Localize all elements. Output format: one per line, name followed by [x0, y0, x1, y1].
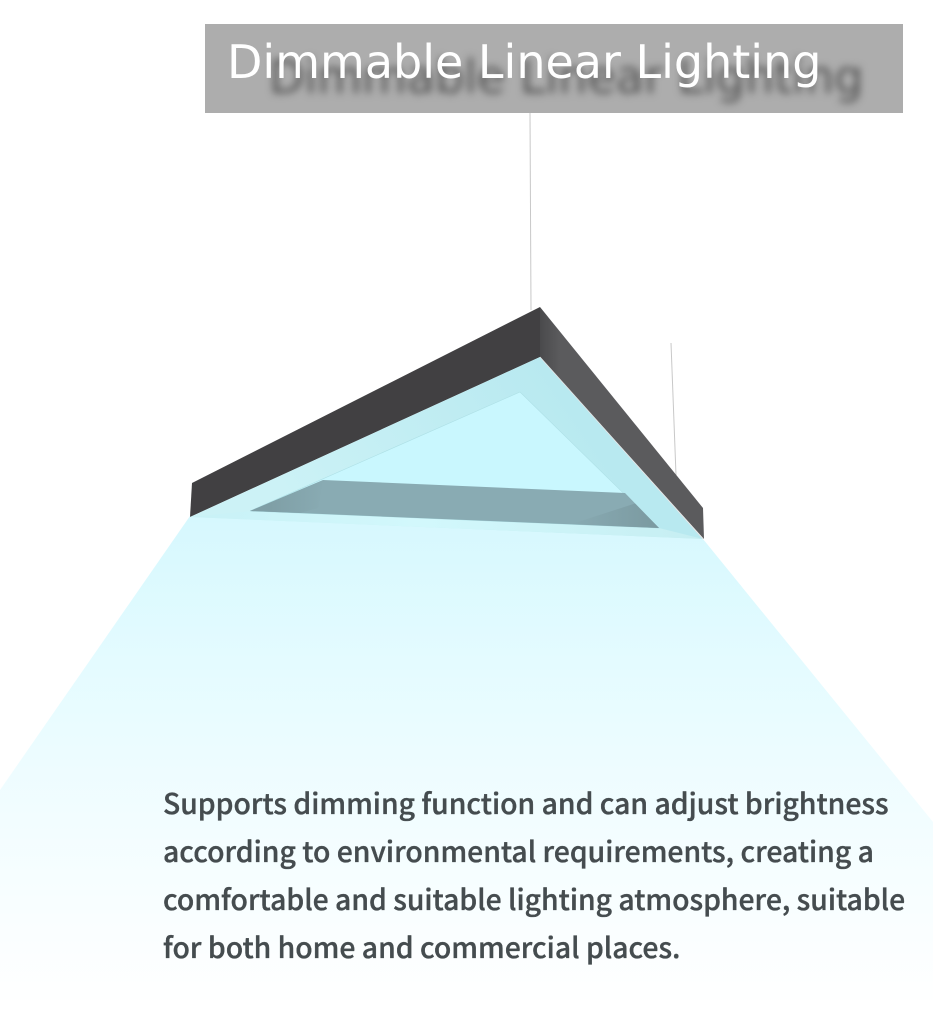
description text: [163, 782, 905, 967]
light beam: [0, 516, 933, 1011]
suspension wires: [530, 112, 676, 475]
inner opening: [250, 392, 659, 528]
frame bottom strip: [190, 511, 703, 539]
diffuser frame: [190, 357, 703, 539]
frame edge highlight: [540, 357, 703, 539]
description text: according to environmental requirements, creating a: [163, 830, 874, 871]
title: Dimmable Linear Lighting: [227, 35, 821, 89]
band right corner shade: [570, 504, 659, 528]
description text: comfortable and suitable lighting atmosphere, suitable: [163, 878, 905, 919]
description text: Supports dimming function and can adjust brightness: [163, 782, 889, 823]
shaded band: [250, 480, 659, 528]
description text: for both home and commercial places.: [163, 926, 680, 967]
lamp housing: [190, 307, 704, 539]
title shadow: Dimmable Linear Lighting: [269, 50, 863, 104]
band left corner shade: [250, 480, 323, 513]
title banner: [205, 24, 903, 113]
